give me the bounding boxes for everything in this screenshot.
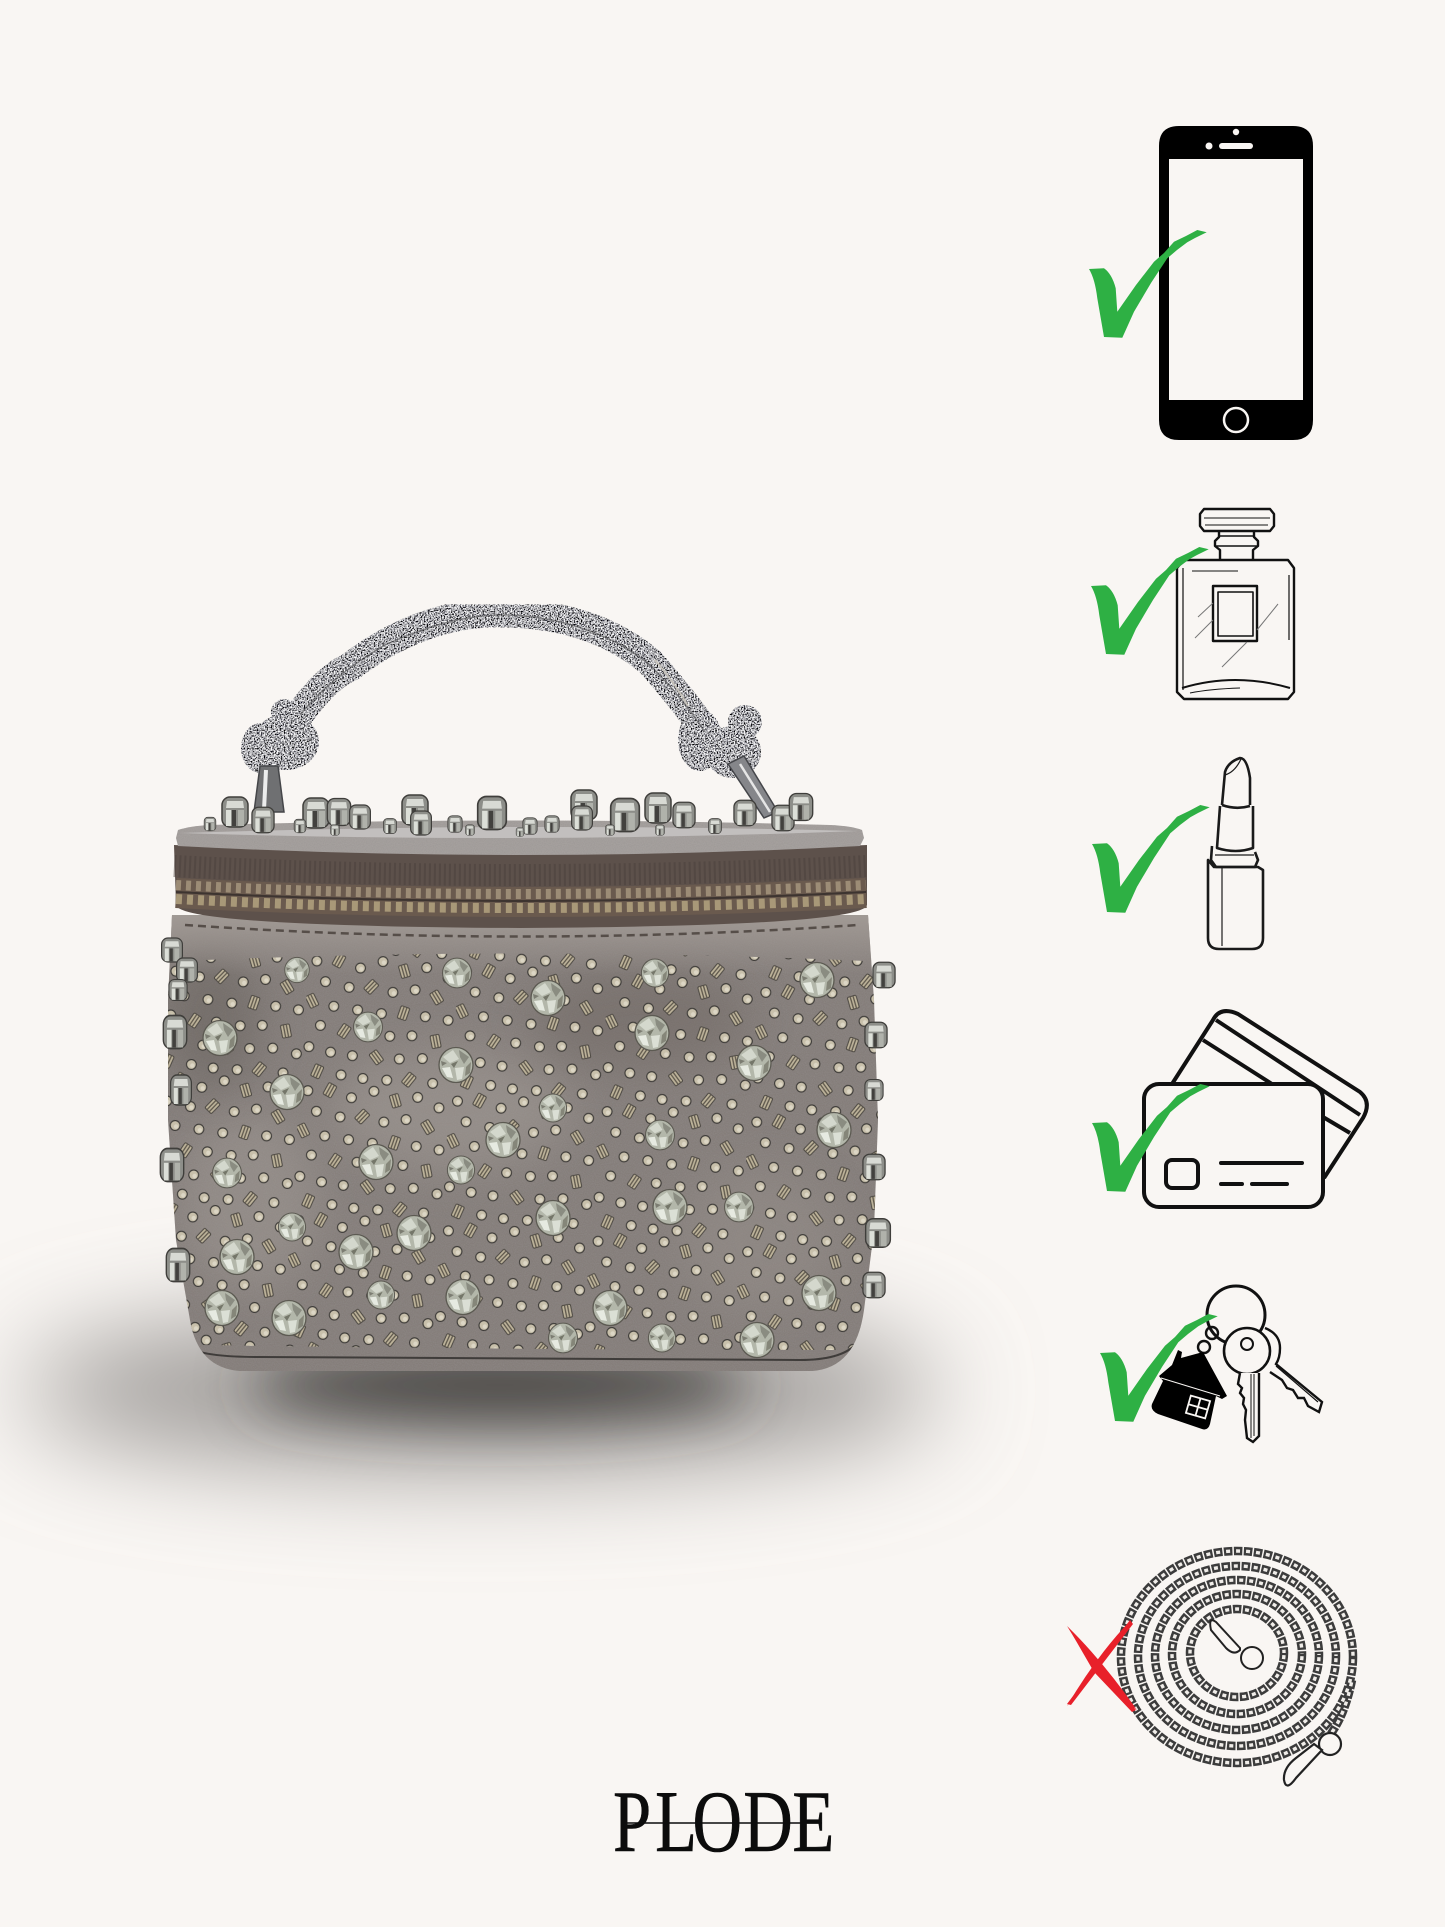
side crystals — [160, 938, 895, 1298]
crystals on lid — [204, 790, 813, 836]
product photo: crystal vanity bag — [160, 613, 895, 1371]
green check mark — [1092, 1084, 1210, 1192]
handle posts — [254, 766, 284, 812]
icon: house keys with check — [1100, 1286, 1322, 1442]
green check mark — [1100, 1314, 1218, 1422]
inner clasp — [1210, 1620, 1263, 1669]
floor shadow under bag — [20, 1312, 940, 1468]
zipper — [174, 845, 867, 928]
large crystals on bag front — [203, 957, 851, 1358]
green check mark — [1092, 805, 1210, 913]
icon: crossed-out chain strap — [1067, 1551, 1353, 1786]
icon: lipstick with check — [1092, 758, 1263, 949]
icon: phone with check — [1089, 126, 1313, 440]
bag body — [160, 915, 890, 1371]
bag lid — [176, 820, 864, 855]
red cross — [1067, 1620, 1137, 1712]
outer clasp — [1284, 1733, 1341, 1786]
bag handle — [241, 613, 778, 818]
green check mark — [1091, 547, 1209, 655]
brand logo: PLODE: PLODE — [613, 1774, 834, 1871]
icon: perfume bottle with check — [1091, 509, 1294, 699]
green check mark — [1089, 230, 1207, 338]
icon: credit cards with check — [1092, 1011, 1367, 1207]
coiled chain — [1121, 1551, 1353, 1763]
